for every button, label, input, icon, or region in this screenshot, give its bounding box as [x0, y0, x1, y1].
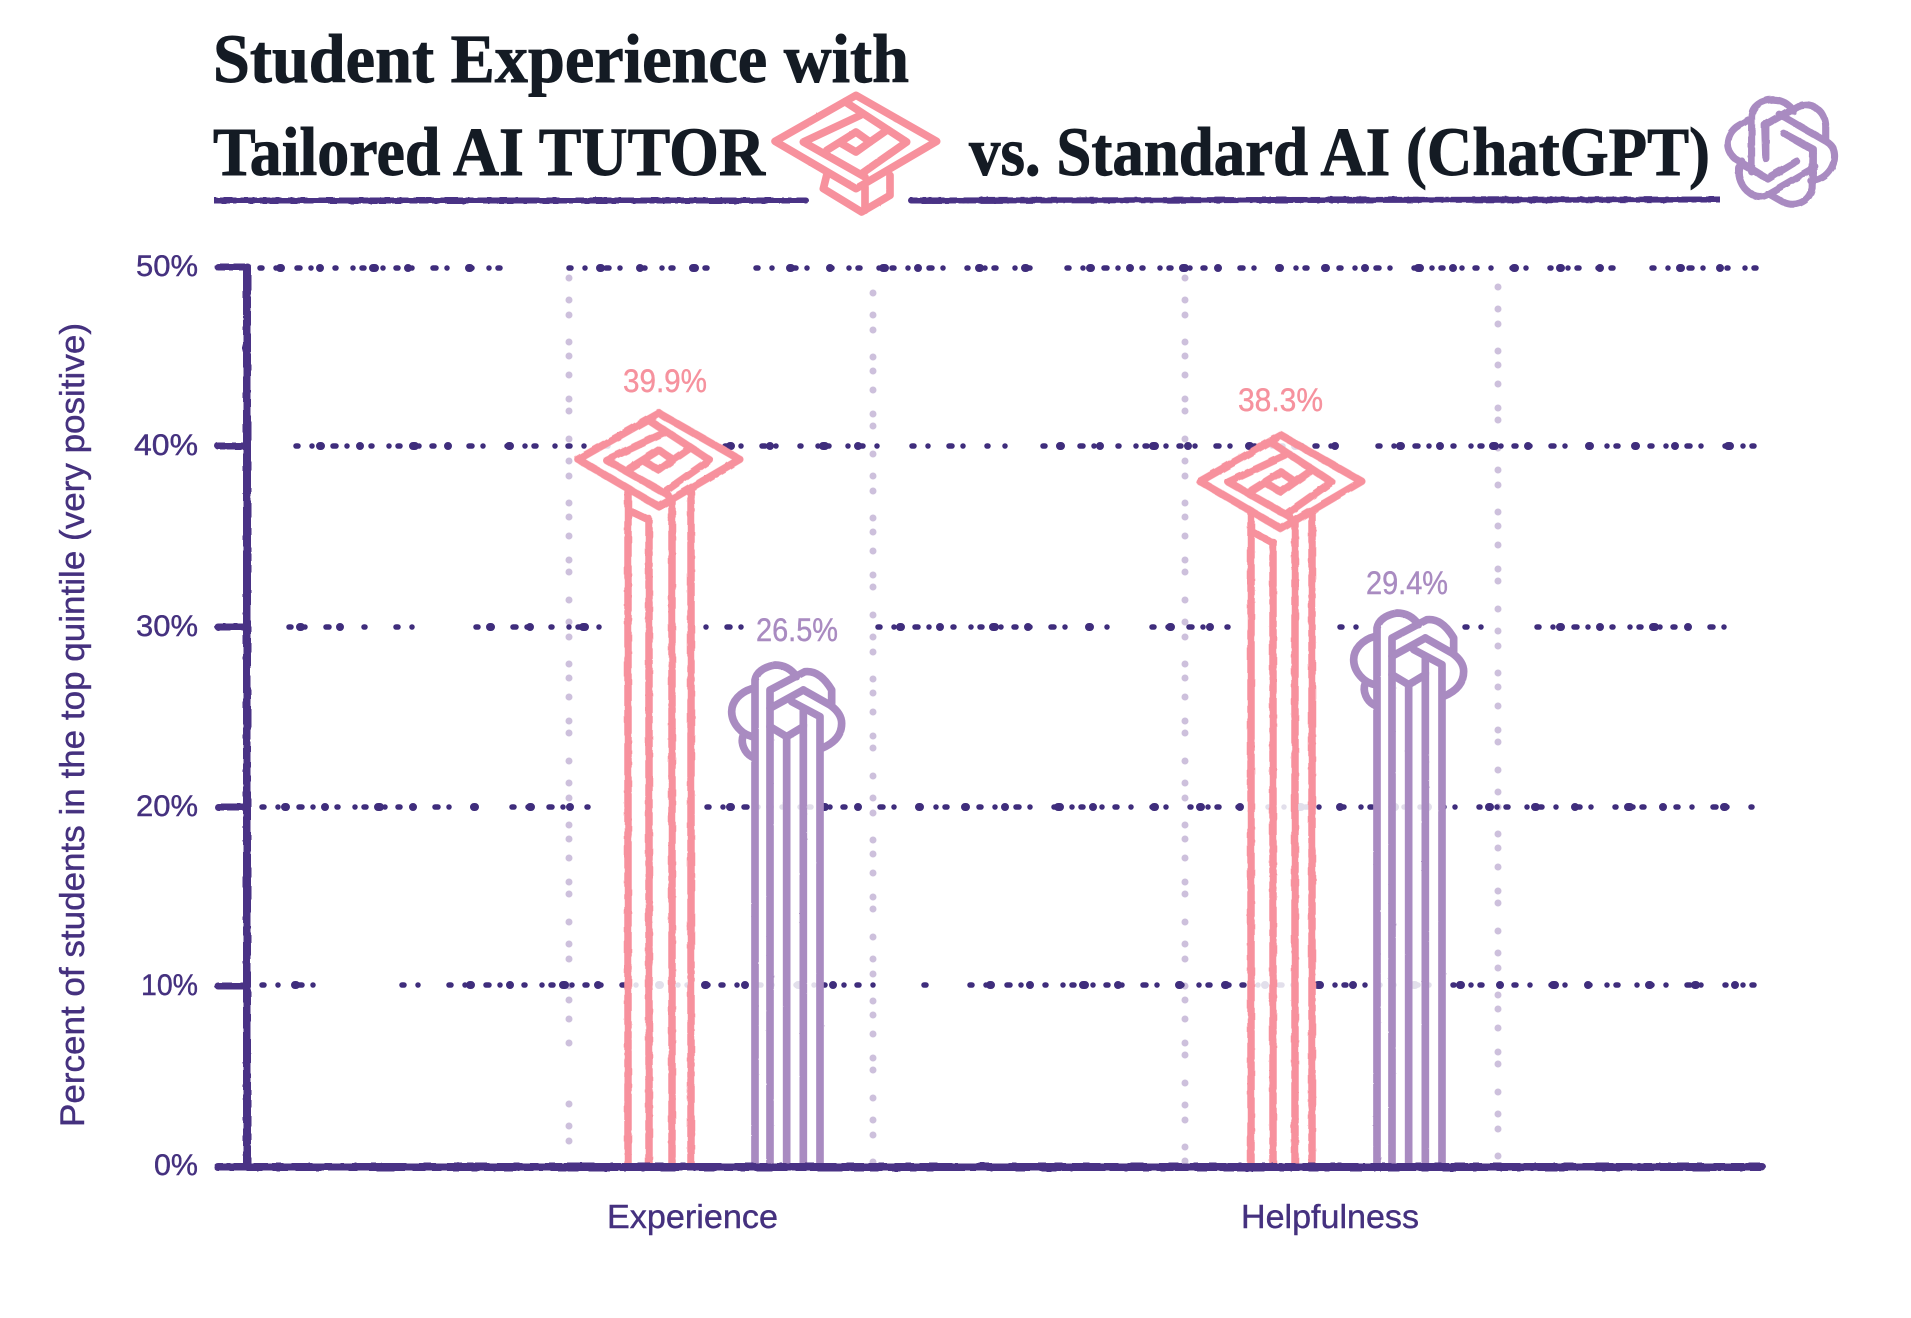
chart axes	[218, 267, 1762, 1167]
icon: ChatGPT knot	[1721, 100, 1842, 212]
title underline	[214, 200, 1720, 201]
value label 26.5%: 26.5%	[756, 612, 838, 648]
y-axis tick labels	[134, 250, 198, 1182]
title: Tailored AI TUTOR	[213, 114, 766, 190]
category label: Helpfulness: Helpfulness	[1241, 1198, 1419, 1235]
y-axis tick labels: 30%	[136, 610, 198, 643]
value label 38.3%: 38.3%	[1238, 382, 1323, 418]
y-axis tick labels: 50%	[136, 250, 198, 283]
value label 39.9%: 39.9%	[623, 363, 707, 399]
y-axis title: Percent of students in the top quintile (very positive)	[54, 323, 92, 1127]
horizontal dotted gridlines	[260, 268, 1762, 985]
bar: Experience tailored AI 39.9%	[578, 413, 740, 1165]
value label 29.4%: 29.4%	[1366, 565, 1448, 601]
y-axis tick labels: 0%	[154, 1149, 198, 1182]
vertical dotted guides	[569, 278, 1498, 1165]
y-axis tick labels: 10%	[141, 969, 198, 1002]
y-axis tick labels: 20%	[136, 790, 198, 823]
bar: Helpfulness tailored AI 38.3%	[1200, 435, 1362, 1165]
bar: Experience ChatGPT 26.5%	[732, 665, 842, 1165]
bar: Helpfulness ChatGPT 29.4%	[1354, 613, 1464, 1165]
icon: tailored tutor mortarboard	[775, 95, 937, 212]
title: vs. Standard AI (ChatGPT)	[969, 114, 1710, 190]
title	[213, 21, 1710, 190]
category label: Experience: Experience	[607, 1198, 778, 1235]
y-axis tick labels: 40%	[134, 429, 198, 462]
title: Student Experience with	[213, 21, 909, 97]
